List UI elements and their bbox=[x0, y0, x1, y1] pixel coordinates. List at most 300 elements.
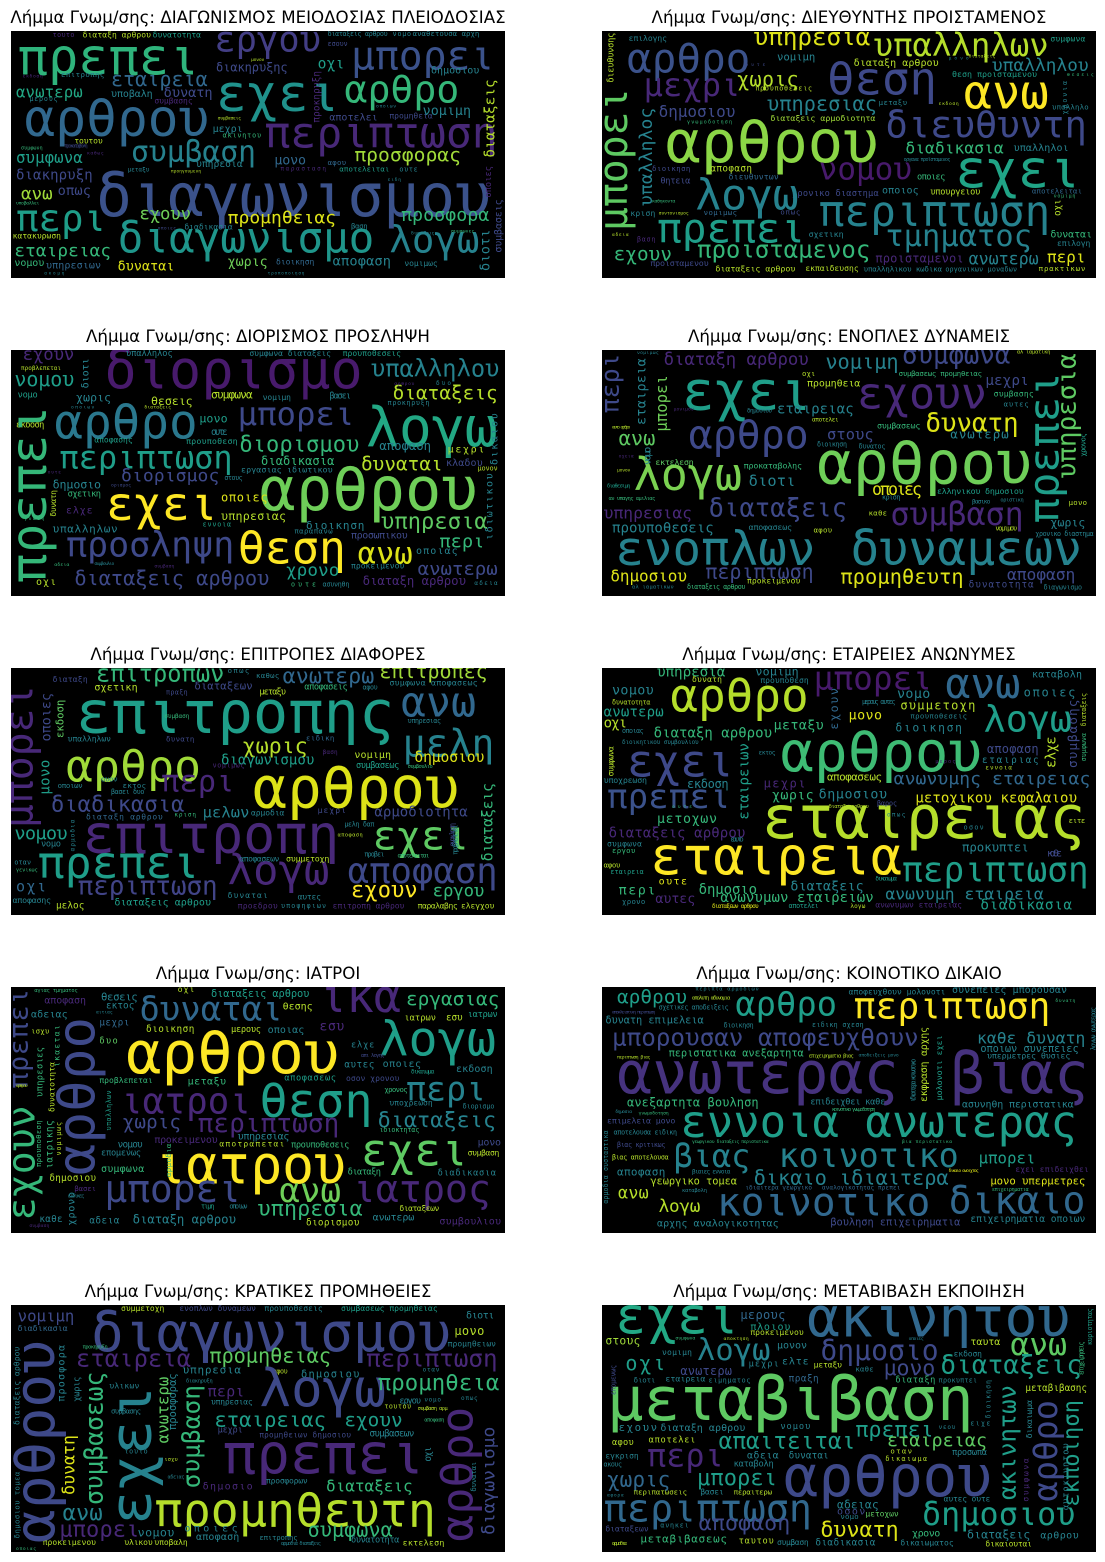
word cloud: υποψηφιων bbox=[281, 902, 326, 910]
word cloud: θεση bbox=[259, 1074, 373, 1129]
word cloud: δυναται bbox=[361, 453, 443, 476]
word cloud: μεταβιβασεως bbox=[640, 1532, 727, 1545]
word cloud: περι bbox=[406, 1069, 486, 1108]
word cloud: διοικηση bbox=[817, 441, 847, 449]
word cloud: εχει bbox=[373, 814, 469, 860]
word cloud: ταυτου bbox=[739, 1536, 774, 1546]
word cloud: διαταξεις bbox=[326, 1477, 413, 1496]
word cloud: βαση bbox=[637, 236, 655, 244]
word cloud: ενοπλων δυναμεων bbox=[179, 1304, 256, 1313]
word cloud: διοτι bbox=[80, 358, 91, 388]
word cloud: αποφαση bbox=[710, 164, 752, 175]
word cloud: προκαταβολης bbox=[744, 460, 802, 470]
word cloud: καθως bbox=[87, 150, 104, 156]
word cloud: συμφωνες bbox=[451, 230, 475, 235]
word cloud: βασει δυο bbox=[111, 788, 144, 796]
word cloud: διορισμο bbox=[104, 338, 363, 401]
word cloud: αφου bbox=[363, 684, 378, 692]
word cloud: προυποθεσεις bbox=[264, 1304, 323, 1313]
word cloud: δυνατη bbox=[925, 409, 1019, 439]
word cloud: προκειμενου bbox=[747, 576, 801, 585]
word cloud bbox=[0, 970, 505, 1233]
word cloud: τροποποιηση bbox=[268, 271, 305, 276]
word cloud: διοτι bbox=[477, 229, 493, 271]
word cloud: διοικηση bbox=[895, 720, 962, 734]
word cloud: γνωση bbox=[24, 517, 45, 522]
word cloud: μπορει bbox=[652, 375, 671, 432]
word cloud: οποιας bbox=[416, 546, 458, 557]
word cloud: αυτες bbox=[655, 892, 695, 907]
word cloud: εκτελεση bbox=[655, 457, 694, 467]
word cloud: αρθρο bbox=[735, 984, 837, 1023]
word cloud: μελων bbox=[203, 803, 249, 821]
word cloud: μεταξυ bbox=[879, 98, 908, 107]
word cloud: νομο bbox=[393, 30, 411, 38]
word cloud: εκτος bbox=[759, 750, 776, 757]
word cloud: αδεια bbox=[612, 232, 629, 238]
panel: ΚΟΙΝΟΤΙΚΟ ΔΙΚΑΙΟ bbox=[602, 964, 1097, 1233]
word cloud: υπαλληλοι bbox=[1014, 143, 1069, 154]
word cloud: προυποθεσεις bbox=[910, 712, 967, 721]
word cloud: ανεξαρτητα βουληση bbox=[627, 1095, 759, 1109]
word cloud: νομου bbox=[819, 151, 912, 187]
word cloud: ανω bbox=[964, 65, 1049, 120]
word cloud: αφου bbox=[604, 860, 621, 869]
word cloud: εσυ bbox=[319, 1019, 344, 1034]
word cloud: οχι bbox=[36, 577, 56, 588]
word cloud: καταβολη bbox=[1032, 669, 1082, 680]
word cloud: οποιες bbox=[1024, 685, 1075, 699]
word cloud: γεωργικου διαταξεις περιστατικα bbox=[692, 1139, 769, 1145]
word cloud: διοικηση bbox=[146, 1024, 194, 1035]
word cloud: υπαλληλων bbox=[53, 523, 118, 536]
word cloud: οποιας bbox=[16, 1547, 36, 1552]
word cloud: λογων ανωτερας bbox=[1089, 1007, 1097, 1050]
word cloud: συμβουλιο bbox=[94, 561, 115, 567]
word cloud: οπως bbox=[780, 207, 800, 216]
word cloud: διαταξεις bbox=[790, 880, 864, 895]
word cloud: θεσεις bbox=[151, 394, 193, 408]
word cloud: δυνατοτητα bbox=[612, 699, 650, 707]
word cloud: περιπτωση bbox=[78, 872, 218, 902]
word cloud: υπαλληλος bbox=[636, 108, 657, 206]
word cloud: μεταξυ bbox=[814, 1361, 842, 1370]
word cloud: οχι bbox=[604, 715, 627, 731]
word cloud: συμβασεως bbox=[877, 420, 920, 430]
word cloud: ειτε bbox=[1069, 816, 1085, 825]
word cloud: προμηθειας bbox=[228, 208, 336, 229]
word cloud: υπηρεσια bbox=[1052, 353, 1082, 478]
word cloud: συμμετοχη bbox=[900, 699, 975, 713]
word cloud bbox=[0, 659, 505, 915]
word cloud: αρθρο bbox=[627, 35, 750, 83]
word cloud: νομιμη bbox=[825, 349, 899, 373]
word cloud: οχεια bbox=[619, 454, 634, 459]
word cloud: ανω bbox=[21, 184, 53, 204]
word cloud: εχει bbox=[615, 1287, 739, 1346]
word cloud: ικα bbox=[319, 970, 401, 1023]
word cloud: αρθρο bbox=[432, 1407, 484, 1542]
word cloud: εχουν bbox=[857, 369, 987, 419]
word cloud: εταιρειας bbox=[887, 1431, 987, 1452]
word cloud: μερος bbox=[935, 759, 955, 765]
word cloud: αφου bbox=[612, 1438, 634, 1448]
word cloud: μεταξυ bbox=[188, 1076, 226, 1087]
word cloud: μεταβιβασης bbox=[1025, 1383, 1087, 1394]
word cloud: διαθεσιμη bbox=[607, 483, 630, 489]
word cloud: ανωτερω bbox=[950, 427, 1009, 441]
word cloud: διαταξεων bbox=[399, 1204, 440, 1213]
word cloud: πρεπει bbox=[855, 1418, 934, 1443]
word cloud: συμβασεων bbox=[369, 1429, 414, 1440]
word cloud: περι bbox=[596, 353, 625, 413]
word cloud: εργου bbox=[399, 1396, 421, 1406]
word cloud: βαρος bbox=[877, 799, 897, 807]
word cloud: ουτε bbox=[48, 470, 61, 475]
word cloud: χρονικο διαστημα bbox=[792, 189, 879, 199]
word cloud: ιατροι bbox=[121, 1082, 251, 1123]
panel: ΔΙΕΥΘΥΝΤΗΣ ΠΡΟΙΣΤΑΜΕΝΟΣ bbox=[591, 8, 1096, 278]
word cloud: μπορει bbox=[979, 1149, 1035, 1168]
word cloud: χωρις bbox=[72, 1377, 82, 1402]
word cloud: εσυ bbox=[446, 1012, 463, 1023]
word cloud: οποιες bbox=[158, 227, 176, 232]
word cloud: διαγωνισμο bbox=[118, 214, 374, 264]
word cloud: δυνατη επιμελεια bbox=[605, 1015, 704, 1027]
word cloud: αυτο αρθρο bbox=[612, 425, 631, 431]
word cloud: μονο bbox=[199, 412, 228, 426]
word cloud: εργου bbox=[612, 846, 636, 855]
word cloud: ιδιοκτητας bbox=[379, 1126, 419, 1134]
word cloud: λογω bbox=[389, 218, 479, 262]
word cloud: διαταξεις αρθρου bbox=[687, 583, 745, 591]
word cloud: αρθρο bbox=[46, 1017, 107, 1175]
word cloud: νομιμως bbox=[404, 259, 438, 268]
word cloud: διαταξεις bbox=[709, 493, 847, 523]
word cloud: αλ ιαματικη bbox=[1017, 349, 1050, 355]
word cloud: εχουν bbox=[139, 204, 191, 224]
word cloud: μετοχικου κεφαλαιου bbox=[915, 790, 1077, 806]
word cloud: αποφαση bbox=[338, 832, 363, 838]
word cloud: στους bbox=[224, 474, 243, 482]
word cloud: εταιρειας bbox=[14, 242, 111, 262]
word cloud: επιχειρηματια bbox=[992, 1187, 1029, 1193]
panel: ΔΙΑΓΩΝΙΣΜΟΣ ΜΕΙΟΔΟΣΙΑΣ ΠΛΕΙΟΔΟΣΙΑΣ bbox=[10, 8, 506, 278]
word cloud: περιπτα αρμοδιων bbox=[695, 986, 759, 992]
word cloud: υπαλληλικου κωδικα bbox=[864, 265, 943, 274]
word cloud: μονο bbox=[884, 1356, 935, 1381]
word cloud: υπηρεσιες bbox=[36, 1047, 46, 1097]
word cloud: διαγωνισμο bbox=[478, 1427, 499, 1535]
word cloud: προβλεπεται bbox=[21, 365, 61, 372]
word cloud: οπως bbox=[58, 183, 91, 199]
word cloud: διοτι bbox=[634, 1375, 655, 1384]
word cloud: περιπτωση bbox=[59, 438, 233, 476]
word cloud: μονιμου bbox=[674, 408, 694, 413]
word cloud: μεταξυ bbox=[259, 688, 286, 698]
word cloud: κριση bbox=[882, 493, 900, 501]
word cloud: εταιρεια bbox=[76, 1345, 191, 1373]
word cloud: οποιες bbox=[917, 172, 945, 182]
word cloud: πραξη bbox=[166, 689, 188, 697]
word cloud: αρθρου bbox=[394, 381, 415, 387]
word cloud: οσον bbox=[964, 824, 984, 832]
word cloud: κριση bbox=[174, 811, 196, 818]
word cloud: διαταξη αρθρου bbox=[829, 804, 869, 810]
word cloud: βιαιες εννοια bbox=[692, 1169, 731, 1176]
word cloud: επομενως bbox=[609, 1365, 617, 1395]
word cloud: ελχε bbox=[351, 1041, 374, 1051]
word cloud: συμφωνα bbox=[1022, 1458, 1031, 1502]
word cloud: αποφασεως bbox=[284, 1073, 336, 1083]
word cloud: χωρις bbox=[737, 67, 799, 91]
word cloud: ισχυ bbox=[31, 1027, 50, 1036]
word cloud: εκτος bbox=[123, 781, 146, 790]
word cloud: περι bbox=[1047, 248, 1085, 267]
word cloud: διορισμου bbox=[306, 1217, 360, 1228]
word cloud: πρακτικων bbox=[1039, 264, 1085, 273]
word cloud: συμβαση bbox=[176, 1385, 205, 1488]
word cloud: πρεπει bbox=[1020, 372, 1069, 523]
word cloud: αδειας bbox=[168, 1474, 184, 1480]
word cloud: καθε bbox=[1047, 848, 1062, 859]
word cloud: προισταμενος bbox=[697, 236, 870, 264]
word cloud: υπηρεσιων bbox=[46, 260, 101, 271]
word cloud: χωρις bbox=[607, 1468, 670, 1492]
word cloud: ανωτερω bbox=[283, 664, 374, 689]
word cloud: νομου bbox=[138, 1526, 174, 1540]
word cloud: εταιρειων bbox=[737, 743, 753, 820]
word cloud: θεσεις bbox=[101, 990, 138, 1003]
word cloud: οποιων bbox=[58, 781, 83, 790]
word cloud: οχι bbox=[802, 369, 815, 378]
word cloud: αφου bbox=[328, 158, 347, 167]
word cloud: δημοσιου bbox=[414, 749, 485, 766]
word cloud: περιπτωση bbox=[198, 1109, 339, 1139]
word cloud: διοικητικου συμβουλιου bbox=[622, 739, 699, 746]
word cloud: εχουν bbox=[827, 688, 841, 730]
word cloud: χρονο bbox=[912, 1529, 940, 1540]
word cloud: εταιρεια bbox=[650, 828, 902, 888]
word cloud: προμηθεια bbox=[378, 1370, 499, 1396]
word cloud: αποφευχθουν μολονοτι bbox=[849, 987, 945, 996]
word cloud: συμφωνα bbox=[675, 1337, 696, 1342]
word cloud: διαταξεις αρθρου bbox=[211, 988, 309, 1000]
word cloud: επομενως bbox=[101, 1148, 141, 1158]
word cloud: διευθυντων bbox=[729, 172, 779, 181]
word cloud: δημοσιου bbox=[49, 1173, 96, 1184]
word cloud: εχουν bbox=[619, 1421, 657, 1434]
word cloud: προεδρου bbox=[238, 902, 278, 911]
word cloud: επιτροπης bbox=[61, 70, 104, 79]
word cloud: επιχειρηματια βιας bbox=[809, 1054, 854, 1060]
word cloud: χωρις bbox=[1050, 516, 1085, 530]
word cloud: διαταξεις bbox=[144, 404, 171, 410]
panel: ΔΙΟΡΙΣΜΟΣ ΠΡΟΣΛΗΨΗ bbox=[0, 327, 505, 596]
word cloud: αυτες bbox=[298, 893, 321, 902]
word cloud: χωρις bbox=[76, 391, 111, 405]
word cloud: αρθρο bbox=[344, 68, 459, 113]
word cloud: υλικων bbox=[109, 1381, 140, 1390]
word cloud: μπορουσαν αποφευχθουν bbox=[612, 1022, 919, 1051]
word cloud: συμβουλιο bbox=[408, 764, 433, 770]
word cloud: χωρις bbox=[243, 734, 308, 759]
word cloud: ανακληση bbox=[448, 823, 456, 846]
word cloud: αποτελει bbox=[812, 417, 839, 424]
word cloud: ικαεται bbox=[52, 1025, 61, 1067]
word cloud: αν υπαγης αμιλιας bbox=[609, 496, 655, 502]
word cloud: διαδικασια bbox=[815, 1538, 876, 1549]
word cloud: συμβασης bbox=[154, 97, 193, 106]
word cloud: γνωμοδοτηση bbox=[639, 1110, 669, 1116]
word cloud: ασυνηθη bbox=[323, 581, 349, 589]
word cloud: δημοσιου bbox=[922, 1497, 1075, 1533]
word cloud: νομιμη bbox=[423, 104, 471, 119]
word cloud: υπηρεσιας bbox=[221, 509, 286, 523]
word cloud: συμφωνα διαταξεις bbox=[249, 349, 331, 358]
word cloud: μελη δαπ bbox=[344, 820, 374, 828]
word cloud: διαταξεις αρμοδιοτητα bbox=[770, 113, 875, 123]
word cloud: αρθρου bbox=[784, 1443, 992, 1511]
word cloud: πρεπει bbox=[4, 989, 35, 1089]
word cloud: μεχρι bbox=[218, 1425, 243, 1435]
word cloud: οποιες bbox=[484, 166, 494, 198]
word cloud: διαταξεις αρθρου bbox=[12, 1346, 21, 1425]
word cloud: συμμετοχη bbox=[121, 1304, 165, 1313]
word cloud: επιτροπης bbox=[259, 1533, 298, 1542]
word cloud: δυνατοτητα bbox=[351, 1535, 399, 1545]
word cloud: ιατρων bbox=[404, 1013, 436, 1023]
word cloud: περιπτωση bbox=[604, 1487, 812, 1532]
word cloud: δυναται bbox=[139, 989, 283, 1029]
word cloud: βιας κριτικως bbox=[617, 1141, 665, 1149]
word cloud: εκδοση bbox=[954, 1350, 982, 1359]
word cloud: αδειας bbox=[837, 1497, 879, 1511]
panel: ΕΠΙΤΡΟΠΕΣ ΔΙΑΦΟΡΕΣ bbox=[0, 645, 505, 915]
word cloud: βαση bbox=[351, 221, 368, 230]
word cloud: ελχε bbox=[66, 505, 93, 516]
word cloud: προυποθεσεις bbox=[612, 521, 714, 537]
word cloud: υποβαλλει bbox=[16, 200, 40, 206]
word cloud: μονο bbox=[274, 153, 306, 168]
word cloud: διαταξη αρθρου bbox=[654, 725, 772, 741]
word cloud: καθε bbox=[39, 1214, 63, 1225]
word cloud: μπορει bbox=[59, 1518, 139, 1543]
word cloud: δυναται bbox=[228, 891, 268, 900]
word cloud: προσφορα bbox=[401, 205, 489, 226]
word cloud: πρεπει bbox=[657, 205, 805, 253]
word cloud: ακους bbox=[604, 1461, 622, 1469]
word cloud: χρονο bbox=[622, 897, 645, 906]
word cloud: οχι bbox=[423, 1447, 434, 1462]
word cloud: περιπτωση bbox=[854, 985, 1050, 1028]
word cloud: οποιες bbox=[909, 1337, 924, 1342]
word cloud: εταιρεια bbox=[111, 67, 208, 91]
word cloud: διαδικασια bbox=[261, 454, 334, 468]
word cloud: λογω bbox=[379, 1011, 496, 1067]
word cloud: δημοσιο bbox=[53, 477, 101, 491]
word cloud: προισταμενοι bbox=[875, 252, 964, 266]
word cloud: περι bbox=[619, 884, 655, 899]
word cloud: ανωνυμων εταιρειων bbox=[720, 890, 874, 906]
word cloud: μπορει bbox=[814, 660, 932, 698]
word cloud: οποιων συνεπειες bbox=[980, 1043, 1079, 1055]
word cloud: οποιας bbox=[268, 1025, 304, 1036]
largest word: αρθρου bbox=[817, 428, 1032, 497]
word cloud: συμβαση bbox=[154, 563, 175, 569]
word cloud: υποβαλη bbox=[111, 89, 153, 100]
word cloud: δυνατη bbox=[166, 734, 194, 743]
word cloud: βιας bbox=[674, 1137, 750, 1175]
word cloud: υπηρεσιας bbox=[238, 1132, 289, 1143]
word cloud: ακινητου bbox=[223, 132, 261, 140]
word cloud: νομιμως bbox=[704, 208, 737, 217]
word cloud: ανωτερω bbox=[680, 1364, 732, 1378]
word cloud: συμβαση bbox=[131, 134, 256, 169]
word cloud: σχετικη bbox=[94, 683, 138, 694]
word cloud: αρμοδιοτητα bbox=[374, 804, 468, 820]
word cloud: οργανα προϊσταμενος bbox=[904, 157, 950, 163]
word cloud: αρμοδια bbox=[251, 808, 285, 817]
word cloud: σχετικες αποδειξεις bbox=[659, 1004, 729, 1012]
word cloud: δυνατη bbox=[59, 1435, 78, 1495]
word cloud: προσφορας bbox=[166, 1373, 179, 1430]
word cloud: νομο bbox=[642, 447, 653, 465]
word cloud: καθε bbox=[855, 1365, 874, 1374]
word cloud: μεχρι bbox=[749, 1360, 779, 1370]
word cloud: πρεπει bbox=[223, 1422, 424, 1487]
word cloud: εσουν bbox=[328, 40, 348, 48]
word cloud: ανωτερω bbox=[969, 249, 1039, 268]
word cloud: νομιμου bbox=[995, 525, 1017, 533]
word cloud: εχουν bbox=[614, 242, 672, 265]
word cloud: συμφωνα bbox=[607, 746, 616, 776]
word cloud: ανω bbox=[1010, 1327, 1067, 1363]
panel: ΕΤΑΙΡΕΙΕΣ ΑΝΩΝΥΜΕΣ bbox=[602, 645, 1096, 915]
word cloud: συμφωνα bbox=[902, 340, 1010, 370]
word cloud: δυνατη bbox=[820, 1518, 899, 1543]
word cloud: διαδικασια bbox=[980, 898, 1072, 914]
word cloud: μερους bbox=[740, 1308, 785, 1322]
word cloud: δυνατη bbox=[1055, 998, 1076, 1004]
word cloud: προβει bbox=[364, 850, 384, 858]
word cloud: αναλογικοτητας πρεπει bbox=[822, 1185, 900, 1192]
word cloud: βασικο bbox=[972, 498, 991, 505]
word cloud: συμβαση bbox=[29, 1223, 50, 1229]
word cloud: διαταξεις αρθρου bbox=[715, 264, 795, 274]
word cloud: οποιων bbox=[71, 405, 95, 410]
word cloud: νομου bbox=[118, 1140, 143, 1151]
word cloud: βιας bbox=[950, 1041, 1089, 1108]
word cloud: δυνατος bbox=[859, 442, 885, 450]
word cloud: προμηθεια bbox=[389, 111, 433, 120]
word cloud: οπως bbox=[228, 666, 249, 675]
word cloud: εκφραση αρχης bbox=[919, 1027, 930, 1102]
word cloud: πρεπει bbox=[0, 405, 58, 583]
word cloud: προσληψη bbox=[66, 526, 234, 566]
word cloud: υπαλληλου bbox=[992, 56, 1089, 76]
word cloud: πρεπει bbox=[38, 837, 199, 889]
word cloud: διορισμος bbox=[121, 466, 219, 487]
word cloud: δημοσιο bbox=[820, 1334, 939, 1367]
word cloud: προμηθευτη bbox=[840, 564, 964, 588]
word cloud: αποφαση bbox=[699, 1511, 790, 1536]
word cloud: μετοχων bbox=[657, 812, 717, 827]
word cloud: συμφωνα bbox=[16, 148, 83, 167]
word cloud: βια περιστατικα bbox=[902, 1139, 952, 1145]
word cloud: εκπαιδευσης bbox=[805, 264, 859, 273]
word cloud: αρθρου bbox=[16, 1083, 28, 1089]
